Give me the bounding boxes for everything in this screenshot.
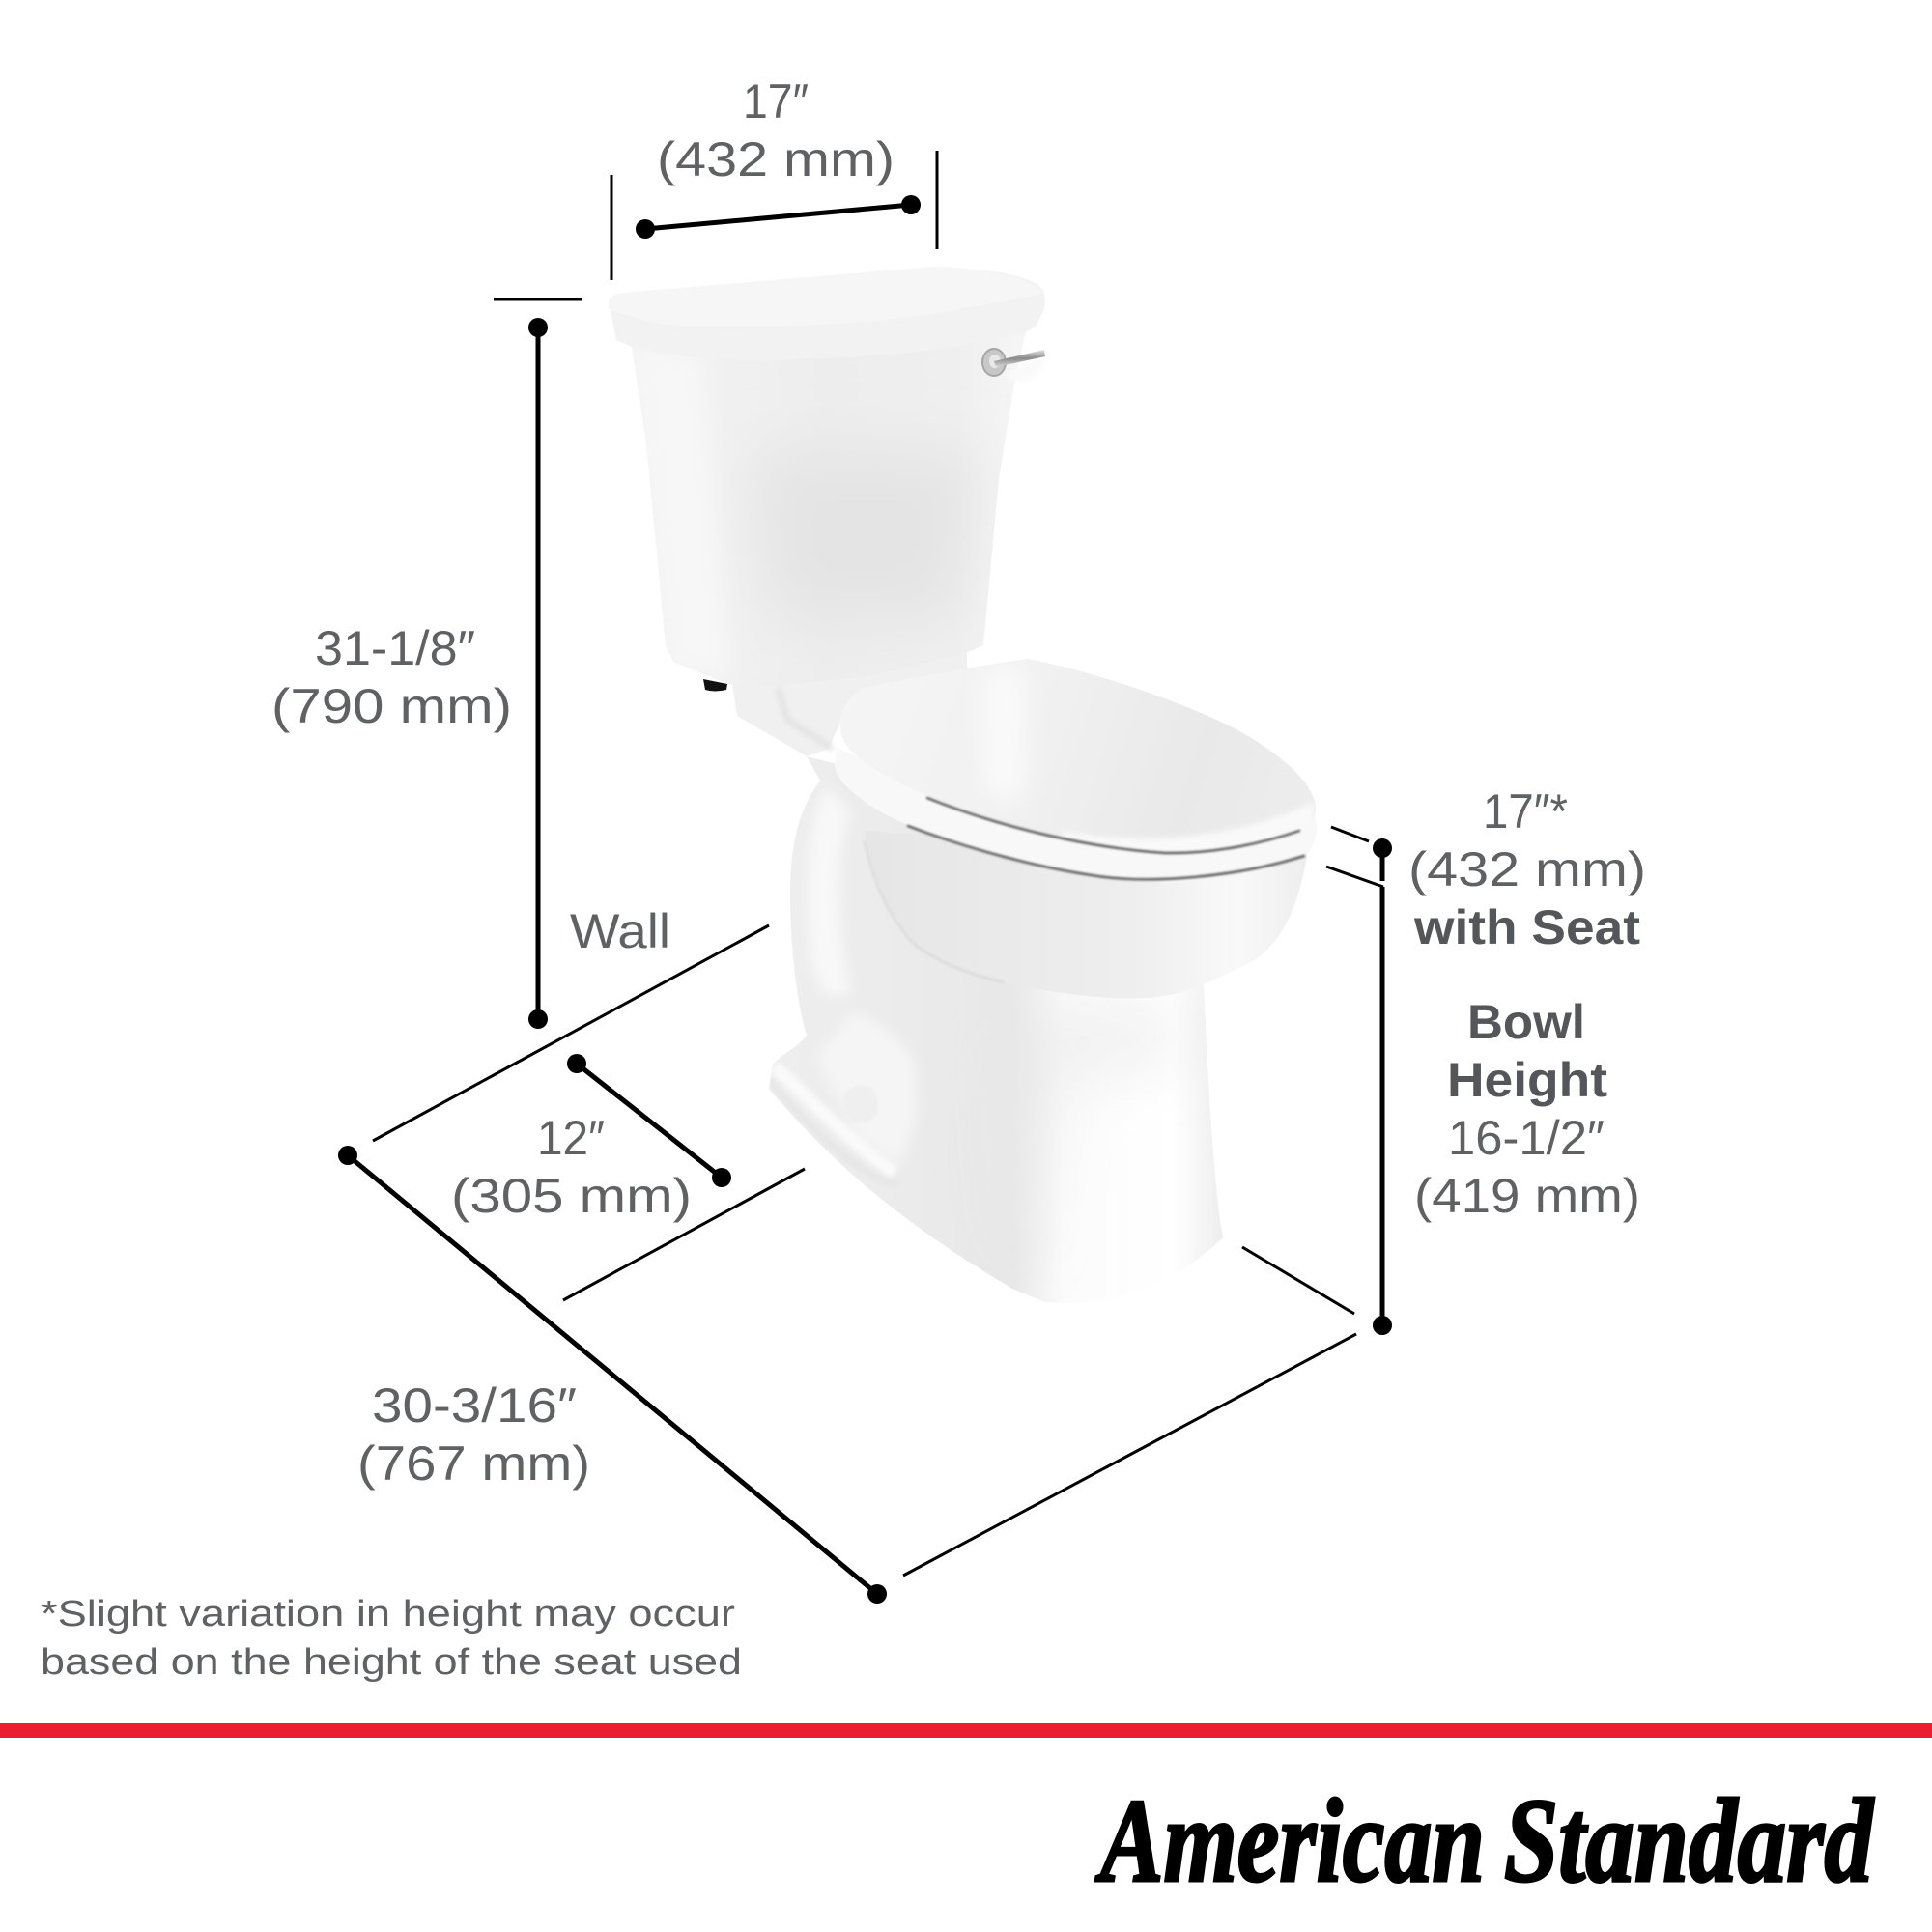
dimension: bowl height — [1326, 784, 1646, 1335]
American Standard logo: American — [1094, 1775, 1485, 1907]
toilet tank — [632, 330, 1026, 687]
footnote — [41, 1594, 742, 1683]
footnote: based on the height of the seat used — [41, 1642, 742, 1683]
label: bowl height values — [1408, 784, 1646, 1223]
label: bowl height values: 17″* — [1483, 784, 1568, 838]
bolt cap — [843, 1086, 877, 1123]
dimension: rough-in 12 inch — [451, 1054, 805, 1300]
label: 30-3/16 inch depth: (767 mm) — [357, 1436, 590, 1491]
label: bowl height values: Bowl — [1467, 995, 1585, 1049]
label: 12 inch rough-in: 12″ — [537, 1111, 605, 1165]
closed seat lid — [840, 659, 1316, 865]
wall reference line and label — [373, 904, 769, 1141]
shadow line under seat lid — [927, 798, 1299, 853]
tank lid — [609, 267, 1045, 360]
toilet illustration — [609, 267, 1318, 1303]
wall reference line and label: Wall — [570, 904, 670, 958]
flush handle — [982, 349, 1045, 382]
shadow line under rim — [908, 826, 1304, 879]
label: bowl height values: (432 mm) — [1408, 842, 1646, 896]
label: bowl height values: Height — [1447, 1053, 1607, 1107]
red divider bar — [0, 1723, 1932, 1738]
American Standard logo — [1094, 1775, 1875, 1907]
label: bowl height values: (419 mm) — [1414, 1169, 1640, 1223]
bowl basin — [865, 831, 1307, 998]
footnote: *Slight variation in height may occur — [41, 1594, 735, 1634]
floor reference lines — [903, 1247, 1356, 1576]
label: 17 inch tank width: 17″ — [743, 74, 809, 128]
dimension: overall depth — [338, 1146, 887, 1604]
bowl rim — [835, 748, 1318, 883]
toilet neck connecting tank and bowl — [732, 645, 967, 756]
label: 30-3/16 inch depth: 30-3/16″ — [372, 1378, 577, 1433]
dimension: tank width — [611, 74, 937, 280]
label: 17 inch tank width: (432 mm) — [657, 132, 895, 186]
label: 31-1/8 inch height: (790 mm) — [271, 679, 512, 733]
label: bowl height values: with Seat — [1413, 900, 1640, 954]
label: bowl height values: 16-1/2″ — [1448, 1111, 1605, 1165]
label: 31-1/8 inch height: 31-1/8″ — [315, 621, 475, 675]
toilet bowl body and foot — [769, 756, 1223, 1303]
dimension: overall height — [271, 299, 582, 1029]
label: 12 inch rough-in: (305 mm) — [451, 1169, 692, 1223]
black water supply nub — [703, 679, 727, 692]
